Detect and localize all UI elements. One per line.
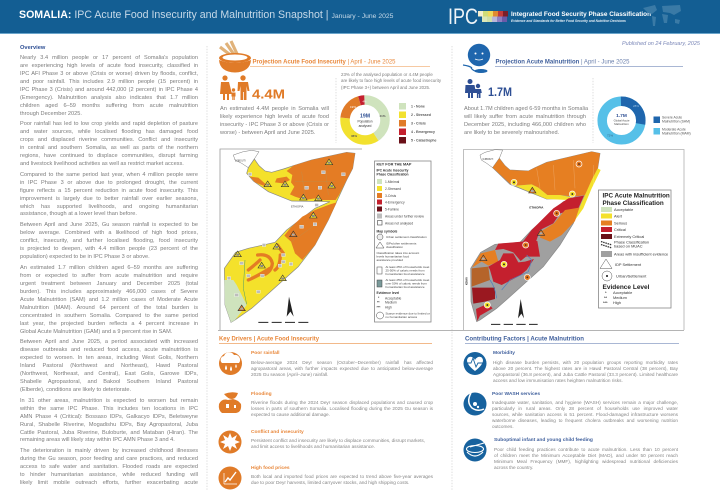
key for the food insecurity map: Acceptable xyxy=(385,296,401,300)
text: food insecurity share xyxy=(341,72,441,90)
driver text: expected to cause additional damage. xyxy=(251,412,330,417)
legend: food insecurity phases: 1 - None xyxy=(411,104,425,108)
map: acute food insecurity: ETHIOPIA xyxy=(291,204,304,208)
key for the food insecurity map: Scarce evidence due to limited or xyxy=(386,312,430,316)
overview paragraph 5 xyxy=(20,265,198,335)
overview paragraph 6: Shabelle Agropastoral, and Bakool Southern Inland Pastoral xyxy=(20,379,198,385)
driver text xyxy=(251,360,433,377)
icon: children blue xyxy=(465,79,482,98)
donut: malnutrition: Malnutrition xyxy=(614,122,629,126)
key for the food insecurity map: Phase Classification xyxy=(376,172,409,176)
overview paragraph 2 xyxy=(20,121,198,167)
legend: food insecurity phases: 4 - Emergency xyxy=(411,130,435,134)
key for the food insecurity map: ** xyxy=(377,300,380,304)
key for the food insecurity map: 2-Stressed xyxy=(385,187,401,191)
driver title: High food prices xyxy=(251,466,290,471)
icon: poor rainfall xyxy=(219,352,242,375)
overview paragraph 7: within the same IPC Phase. This includes ten locations in IPC xyxy=(20,406,198,412)
text: food insecurity projection: worse) - between April and June 2025. xyxy=(220,130,315,136)
overview paragraph 5: from or expected to suffer from acute malnutrition and require xyxy=(20,273,198,279)
key for the malnutrition map: ** xyxy=(604,295,608,300)
IPC tagline: Evidence and Standards for Better Food Security and Nutrition Decisions xyxy=(511,18,626,22)
key for the malnutrition map: Areas with insufficient evidence xyxy=(614,252,668,256)
key for the malnutrition map: Extremely Critical xyxy=(614,234,644,239)
heading: projection malnutrition: Projection Acute Malnutrition | April - June 2025 xyxy=(496,58,630,66)
key for the food insecurity map xyxy=(374,161,431,322)
text: food insecurity projection: An estimated 4.4M people in Somalia will xyxy=(220,106,329,112)
key for the food insecurity map: IPC Acute Insecurity xyxy=(376,168,409,172)
donut: malnutrition: 72% xyxy=(607,134,613,138)
icon: family orange xyxy=(220,75,250,100)
driver text: due to poor Deyr harvests, limited carryover stocks, and high shipping costs. xyxy=(251,480,409,485)
text: food insecurity projection xyxy=(220,106,329,136)
donut: food insecurity phases: Population xyxy=(357,120,373,124)
driver text: 2025 Gu season (April–June) rainfall. xyxy=(251,372,328,377)
legend: malnutrition: Severe Acute xyxy=(662,116,682,120)
column dividers xyxy=(207,46,593,490)
key for the food insecurity map: classification xyxy=(386,245,403,249)
icon: wash xyxy=(464,392,486,416)
key for the food insecurity map: 3-Crisis xyxy=(385,194,397,198)
legend: malnutrition xyxy=(654,116,691,136)
overview paragraph 2: in central and southern Somalia, as well as parts of the northern xyxy=(20,145,198,151)
overview paragraph 5: Malnutrition (MAM). Around 64 percent of the total burden is xyxy=(20,305,198,311)
key for the malnutrition map: Phase Classification xyxy=(602,200,664,207)
key for the food insecurity map: Map symbols xyxy=(376,230,398,234)
overview paragraph 1: IPC Phase 3 (Crisis) and around 442,000 (2 percent) in IPC Phase 4 xyxy=(20,87,198,93)
donut: malnutrition: 28% xyxy=(633,104,639,108)
heading: projection food insecurity: Projection Acute Food Insecurity | April - June 2025 xyxy=(252,58,396,66)
key for the malnutrition map: Phase Classification xyxy=(614,240,649,244)
driver text xyxy=(251,474,433,485)
factor text: access and low immunisation rates heighten malnutrition risks. xyxy=(493,378,623,383)
key for the malnutrition map: based on MUAC xyxy=(614,244,643,248)
key for the food insecurity map: At least 25% of households meet xyxy=(386,278,430,282)
key for the food insecurity map: 1-Minimal xyxy=(385,180,400,184)
map frame left xyxy=(220,149,362,330)
overview paragraph 7: In 31 other areas, malnutrition is expected to worsen but remain xyxy=(20,398,198,404)
legend: malnutrition: Moderate Acute xyxy=(662,128,686,132)
driver text: Below-average 2024 Deyr season (October–December) rainfall has affected xyxy=(251,360,433,364)
driver text: Both local and imported food prices are expected to trend above five-year averages xyxy=(251,474,433,478)
factor text: Poor child feeding practices contribute to acute malnutrition. Less than 10 percent xyxy=(494,446,678,452)
key for the malnutrition map: Alert xyxy=(614,214,623,218)
map: acute food insecurity xyxy=(224,150,355,322)
overview paragraph 2: regions, have continued to displace communities, disrupt farming xyxy=(20,153,198,159)
IPC logo text: IPC xyxy=(448,4,478,29)
publication date: Published on 24 February, 2025 xyxy=(622,41,701,47)
factor text: Agropastoral (36.8 percent), and Juba Cattle Pastoral (33.3 percent). Limited healthcare xyxy=(493,372,678,377)
factor text xyxy=(492,400,678,429)
overview paragraph 1: and poor rainfall. This includes 2.9 million people (15 percent) in xyxy=(20,79,198,85)
key for the food insecurity map: At least 25% of households meet xyxy=(386,265,430,269)
map frame bottom xyxy=(218,330,684,332)
key for the food insecurity map: over 50% of caloric needs from xyxy=(386,282,427,286)
text: malnutrition projection: are likely to be severely malnourished. xyxy=(464,130,559,136)
driver text: Riverine floods during the 2024 Deyr season displaced populations and caused crop xyxy=(251,400,433,405)
text: malnutrition projection xyxy=(464,106,588,136)
key for the food insecurity map: 5-Famine xyxy=(385,208,399,212)
overview paragraph 1: are experiencing high levels of acute food insecurity, classified in xyxy=(20,63,198,69)
overview paragraph 3: assistance, though at a lower level than before. xyxy=(20,211,137,217)
text: food insecurity projection: insecurity - IPC Phase 3 or above (Crisis or xyxy=(220,122,329,128)
icon: wheat bowl xyxy=(219,41,251,72)
icon: infant feeding bowl xyxy=(464,438,486,462)
legend: food insecurity phases: 2 - Stressed xyxy=(411,113,431,117)
overview paragraph 1: through December 2025. xyxy=(20,111,82,117)
overview paragraph 1: Nearly 3.4 million people or 17 percent of Somalia's population xyxy=(20,55,198,61)
overview paragraph 3: which has supported livelihoods, and ongoing humanitarian xyxy=(20,204,198,210)
donut: food insecurity phases: 36% xyxy=(351,134,357,138)
map: acute malnutrition: DJIBOUTI xyxy=(483,159,494,161)
overview paragraph 5: Global Acute Malnutrition (GAM) and a 9 percent rise in SAM. xyxy=(20,329,172,335)
overview paragraph 5: Acute Malnutrition (SAM) and 1.2 million cases of Moderate Acute xyxy=(20,297,198,303)
driver: food prices xyxy=(251,466,433,485)
driver title: Flooding xyxy=(251,392,272,396)
driver text: and limit access to livelihoods and humanitarian assistance. xyxy=(251,444,375,449)
key for the food insecurity map: Classification takes into account xyxy=(376,251,419,255)
factor text: outcomes. xyxy=(492,424,514,429)
key for the food insecurity map: assistance provided xyxy=(376,258,403,262)
key for the malnutrition map xyxy=(598,190,671,308)
overview paragraph 5: burden). This includes approximately 466,000 cases of Severe xyxy=(20,289,198,295)
key for the malnutrition map: Serious xyxy=(614,220,627,226)
legend: food insecurity phases xyxy=(399,103,437,144)
legend: food insecurity phases: 3 - Crisis xyxy=(411,122,426,126)
overview paragraph 7: remaining areas will likely stay within IPC AMN Phase 3 and 4. xyxy=(20,437,175,443)
overview paragraph 3: figure reflects a 15 percent reduction in acute food insecurity. This xyxy=(20,188,198,194)
overview paragraph 7: Rural, Shabelle Riverine, Mogadishu IDPs, Bay Agropastoral, Juba xyxy=(20,422,198,428)
key for the food insecurity map: Areas under further review xyxy=(385,214,424,218)
overview paragraph 6: (Northwest, Northeast, and Central), East Golis, Garowe IDPs, xyxy=(20,371,198,377)
overview paragraph 8 xyxy=(20,448,198,486)
overview paragraph 6 xyxy=(20,339,198,393)
factor title: Morbidity xyxy=(493,351,515,356)
overview paragraph 2: Poor rainfall has led to low crop yields and rapid depletion of pasture xyxy=(20,121,198,127)
map: acute food insecurity: DJIBOUTI xyxy=(235,161,246,163)
header world map xyxy=(643,5,681,26)
donut: food insecurity phases: analysed xyxy=(359,124,372,128)
donut: malnutrition xyxy=(602,101,641,140)
overview paragraph 5: urgent treatment between January and December 2025 (total xyxy=(20,281,198,287)
overview paragraph 1 xyxy=(20,55,198,117)
key for the malnutrition map: Acceptable xyxy=(614,207,633,212)
overview paragraph 6: disease outbreaks and reduced food access, acute malnutrition is xyxy=(20,347,198,353)
overview paragraph 3: Compared to the same period last year, when 4 million people were xyxy=(20,172,198,178)
legend: malnutrition: Malnutrition (SAM) xyxy=(662,120,690,124)
donut: food insecurity phases: 41% xyxy=(380,114,386,118)
overview paragraph 1: IPC AFI Phase 3 or above (Crisis or worse) driven by floods, conflict, xyxy=(20,71,198,77)
map: acute malnutrition xyxy=(465,150,601,324)
driver text xyxy=(251,400,433,417)
driver: conflict xyxy=(251,430,425,449)
overview paragraph 6: Inland Pastoral (Northwest and Northeast), Hawd Pastoral xyxy=(20,363,198,369)
overview paragraph 7 xyxy=(20,398,198,443)
driver text: agropastoral areas, with further impacts expected due to anticipated below-average xyxy=(251,366,433,371)
factor text: sources, while sanitation access is 51 percent. Flood-damaged infrastructure worsens xyxy=(492,412,678,417)
donut: food insecurity phases: 19M xyxy=(360,114,370,120)
key for the food insecurity map: 25-50% of caloric needs from xyxy=(386,268,425,272)
key for the malnutrition map: IDP Settlement xyxy=(615,262,642,267)
key for the food insecurity map: * xyxy=(378,296,380,300)
key for the food insecurity map: KEY FOR THE MAP xyxy=(376,162,412,166)
overview paragraph 3: improvement is largely due to better rainfall over earlier seasons, xyxy=(20,196,198,202)
overview paragraph 5: concentrated in southern Somalia. Compared to the same period xyxy=(20,313,198,319)
overview heading: Overview xyxy=(20,45,45,51)
driver: poor rainfall xyxy=(251,350,433,377)
overview paragraph 2: and water sources, while localised flooding has damaged food xyxy=(20,129,198,135)
map: acute malnutrition: ETHIOPIA xyxy=(529,206,544,210)
figure: 1.7M blue: 1.7M xyxy=(488,85,512,99)
factor text: Minimum Meal Frequency (MMF), highlighting widespread nutritional deficiencies xyxy=(494,459,678,464)
report title: SOMALIA: IPC Acute Food Insecurity and Malnutrition Snapshot | January - June 2025 xyxy=(19,8,393,20)
driver text: losses in parts of southern Somalia. Localised flooding during the 2025 Gu season is xyxy=(251,406,433,411)
key for the food insecurity map: humanitarian food assistance xyxy=(386,272,425,276)
driver title: Conflict and insecurity xyxy=(251,430,304,434)
key for the food insecurity map: Areas not analysed xyxy=(385,222,413,226)
factor text: across the country. xyxy=(494,465,533,470)
donut: food insecurity phases: 4% xyxy=(362,100,367,104)
key for the food insecurity map: Evidence level xyxy=(376,291,399,295)
overview paragraph 2: and livestock livelihood activities as well as restrict market access. xyxy=(20,161,184,167)
text: food insecurity share: are likely to face high levels of acute food insecurity xyxy=(341,78,441,83)
overview paragraph 8: to hinder humanitarian assistance, while reduced funding will xyxy=(20,472,198,478)
donut: malnutrition: Global Acute xyxy=(614,118,630,122)
icon: morbidity heart xyxy=(464,352,486,375)
legend: malnutrition: Malnutrition (MAM) xyxy=(662,132,691,136)
factor: infant feeding xyxy=(494,438,678,470)
key for the food insecurity map: Urban settlement classification xyxy=(386,235,427,239)
key for the malnutrition map: * xyxy=(605,290,607,295)
IPC full name: Integrated Food Security Phase Classification xyxy=(511,11,651,18)
overview paragraph 4: conflict, insecurity, and further localised flooding, food insecurity xyxy=(20,238,198,244)
text: food insecurity projection: likely experience high levels of acute food xyxy=(220,114,329,120)
figure: 4.4M orange: 4.4M xyxy=(252,86,285,102)
overview paragraph 4: below average. Combined with a likelihood of high food prices, xyxy=(20,230,198,236)
overview paragraph 3 xyxy=(20,172,198,217)
factor text: of children meet the Minimum Acceptable Diet (MAD), and under 50 percent reach xyxy=(494,453,678,458)
factor text: above 20 percent. The highest rates are in Hawd Pastoral Central (38 percent), Bay xyxy=(493,366,678,371)
heading: contributing factors: Contributing Factors | Acute Malnutrition xyxy=(465,336,584,342)
driver title: Poor rainfall xyxy=(251,351,280,356)
text: malnutrition projection: December 2025, including 466,000 children who xyxy=(464,122,586,128)
text: malnutrition projection: About 1.7M children aged 6-59 months in Somalia xyxy=(464,106,588,112)
key for the food insecurity map: *** xyxy=(376,306,381,310)
key for the malnutrition map: Acceptable xyxy=(613,290,632,295)
overview paragraph 7: AMN Phase 4 (Critical): Bossaso IDPs, Galkacyo IDPs, Beletweyne xyxy=(20,414,198,420)
overview paragraph 4: population) expected to be in IPC Phase 3 or above. xyxy=(20,254,150,260)
overview paragraph 8: access to safe water and sanitation. Flooded roads are expected xyxy=(20,464,198,470)
factor text: Inadequate water, sanitation, and hygiene (WASH) services remain a major challenge, xyxy=(492,400,678,405)
donut: food insecurity phases xyxy=(345,100,386,140)
key for the malnutrition map: *** xyxy=(603,300,608,305)
key for the malnutrition map: High xyxy=(613,300,621,305)
overview paragraph 2: crops and displaced riverine communities. Conflict and insecurity xyxy=(20,137,198,143)
overview paragraph 5: An estimated 1.7 million children aged 6–59 months are suffering xyxy=(20,265,198,271)
donut: food insecurity phases: 19% xyxy=(350,105,356,109)
key for the food insecurity map: 4-Emergency xyxy=(385,200,405,204)
key for the food insecurity map: humanitarian food assistance xyxy=(386,285,425,289)
overview paragraph 4: is projected to deepen, with 4.4 million people (23 percent of the xyxy=(20,246,198,252)
overview paragraph 8: likely limit mobile outreach efforts, further exacerbating acute xyxy=(20,480,198,486)
overview paragraph 7: Cattle Pastoral, Juba Riverine, Buloburte, and Mataban (Hiran). The xyxy=(20,430,198,436)
overview paragraph 4: Between April and June 2025, Gu season rainfall is expected to be xyxy=(20,222,198,228)
factor text: waterborne diseases, leading to frequent cholera outbreaks and worsening nutrition xyxy=(492,418,678,423)
key for the food insecurity map: IDPs/other settlements xyxy=(386,242,417,246)
heading: key drivers: Key Drivers | Acute Food Insecurity xyxy=(219,336,319,342)
overview paragraph 8: The deterioration is mainly driven by increased childhood illnesses xyxy=(20,448,198,454)
text: food insecurity share: 23% of the analysed population or 4.4M people xyxy=(341,72,433,77)
key for the malnutrition map: Evidence Level xyxy=(602,284,650,291)
text: food insecurity share: (IPC Phase 3+) between April and June 2025. xyxy=(341,85,430,90)
factor title: Suboptimal infant and young child feeding xyxy=(494,438,593,443)
key for the malnutrition map: IPC Acute Malnutrition xyxy=(602,192,670,200)
overview paragraph 3: in IPC Phase 3 or above due to prolonged drought, the current xyxy=(20,180,198,186)
icon: child face xyxy=(463,44,490,73)
overview paragraph 6: Between April and June 2025, a period associated with increased xyxy=(20,339,198,345)
overview paragraph 5: last year, the projected burden reflects a 4 percent increase in xyxy=(20,321,198,327)
map frame right xyxy=(464,150,684,330)
key for the malnutrition map: Critical xyxy=(614,227,626,232)
factor title: Poor WASH services xyxy=(492,392,540,396)
legend: food insecurity phases: 5 - Catastrophe xyxy=(411,138,437,142)
overview paragraph 4 xyxy=(20,222,198,260)
key for the malnutrition map: Medium xyxy=(613,295,627,300)
driver text xyxy=(251,438,425,449)
factor: WASH xyxy=(492,392,678,429)
key for the food insecurity map: levels humanitarian food xyxy=(376,254,409,258)
factor text xyxy=(493,360,678,383)
key for the food insecurity map: High xyxy=(385,306,392,310)
key for the food insecurity map: no humanitarian access xyxy=(386,315,418,319)
header banner xyxy=(0,0,720,34)
overview paragraph 6: (Elberde), conditions are likely to deteriorate. xyxy=(20,387,131,393)
key for the food insecurity map: Medium xyxy=(385,300,397,304)
driver text: Persistent conflict and insecurity are likely to displace communities, disrupt markets, xyxy=(251,438,425,443)
icon: food prices xyxy=(218,466,242,490)
driver: flooding xyxy=(251,392,433,417)
key for the malnutrition map: Urban/Settlement xyxy=(616,274,647,278)
text: malnutrition projection: will likely suffer from acute malnutrition through xyxy=(464,114,586,120)
icon: conflict xyxy=(218,430,242,454)
map: acute malnutrition: KENYA xyxy=(465,277,468,285)
factor text xyxy=(494,446,678,470)
factor text: High disease burden persists, with 20 population groups reporting morbidity rates xyxy=(493,360,678,364)
factor text: particularly in rural areas. Only 28 percent of households use improved water xyxy=(492,406,678,411)
icon: flooding xyxy=(219,392,241,413)
overview paragraph 6: expected to worsen. In ten areas, including West Golis, Northern xyxy=(20,355,198,361)
factor: morbidity xyxy=(493,350,678,383)
donut: malnutrition: 1.7M xyxy=(616,113,627,119)
overview paragraph 1: (Emergency). Malnutrition analysis also indicates that 1.7 million xyxy=(20,95,198,101)
overview paragraph 8: during the Gu season, poor feeding and care practices, and reduced xyxy=(20,456,198,462)
overview paragraph 1: children aged 6–59 months suffering from acute malnutrition xyxy=(20,103,198,109)
header logo swatches xyxy=(478,11,508,22)
